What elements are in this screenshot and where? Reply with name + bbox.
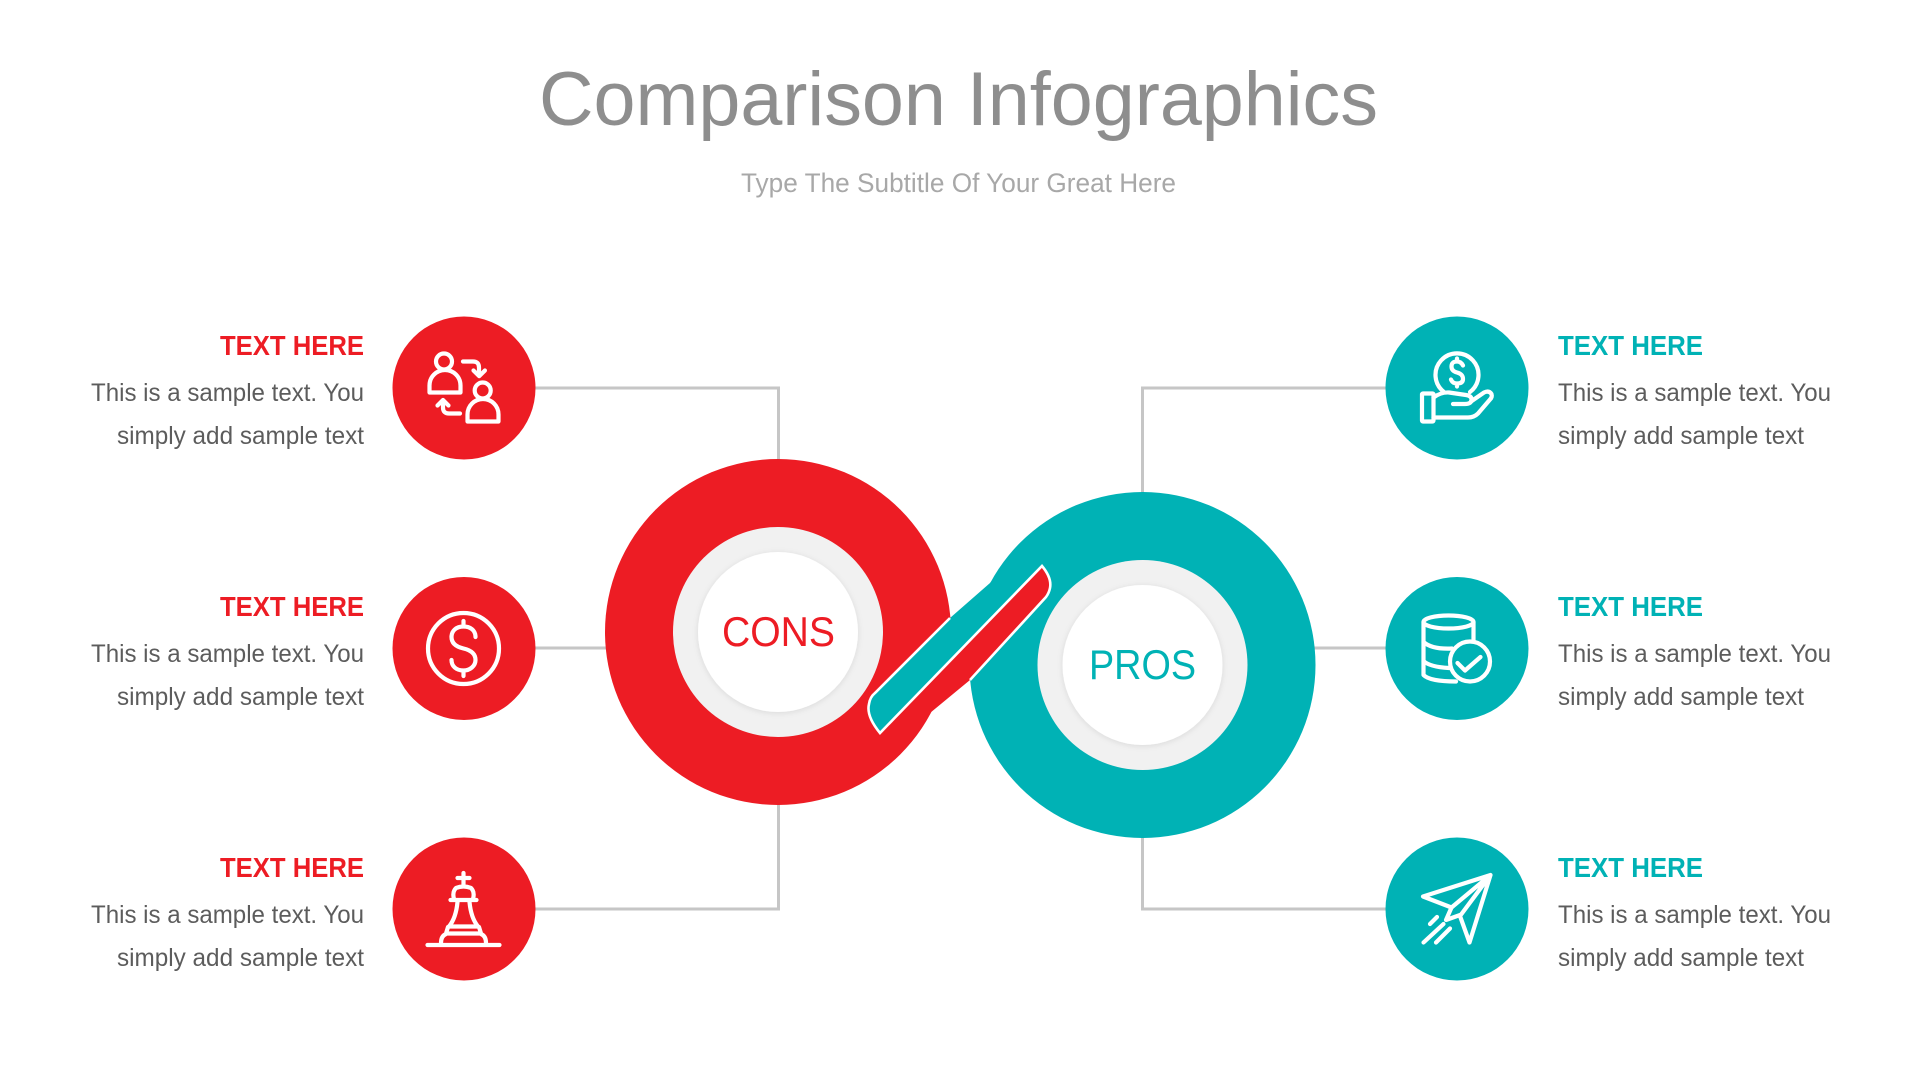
interlocking diagonal link	[868, 560, 1050, 733]
icon circle: chess king	[392, 838, 536, 980]
heading: TEXT HERE	[1558, 852, 1703, 883]
title: Comparison Infographics	[539, 57, 1378, 142]
icon circle: people exchange	[392, 316, 536, 460]
item: cons 2	[91, 577, 536, 720]
description: This is a sample text. You	[91, 640, 364, 668]
description line 2: simply add sample text	[1558, 422, 1804, 450]
pros ring	[970, 492, 1316, 838]
description: This is a sample text. You	[91, 379, 364, 407]
subtitle: Type The Subtitle Of Your Great Here	[741, 168, 1176, 198]
heading: TEXT HERE	[220, 852, 364, 883]
description line 2: simply add sample text	[117, 944, 364, 972]
icon circle: money in hand	[1386, 316, 1528, 460]
connector lines	[534, 388, 1388, 909]
heading: TEXT HERE	[220, 591, 364, 622]
heading: TEXT HERE	[1558, 591, 1703, 622]
icon circle: database check	[1386, 577, 1528, 720]
cons label: CONS	[722, 608, 835, 655]
description: This is a sample text. You	[91, 901, 364, 929]
item: pros 2	[1386, 577, 1831, 720]
description line 2: simply add sample text	[117, 422, 364, 450]
cons ring	[605, 459, 951, 805]
description: This is a sample text. You	[1558, 379, 1831, 407]
heading: TEXT HERE	[1558, 330, 1703, 361]
item: cons 1	[91, 316, 536, 460]
description line 2: simply add sample text	[117, 683, 364, 711]
description: This is a sample text. You	[1558, 640, 1831, 668]
item: pros 3	[1386, 838, 1831, 980]
item: cons 3	[91, 838, 536, 980]
pros label: PROS	[1089, 641, 1196, 688]
heading: TEXT HERE	[220, 330, 364, 361]
icon circle: dollar	[392, 577, 536, 720]
description line 2: simply add sample text	[1558, 683, 1804, 711]
icon circle: paper plane	[1386, 838, 1528, 980]
description: This is a sample text. You	[1558, 901, 1831, 929]
item: pros 1	[1386, 316, 1831, 460]
description line 2: simply add sample text	[1558, 944, 1804, 972]
